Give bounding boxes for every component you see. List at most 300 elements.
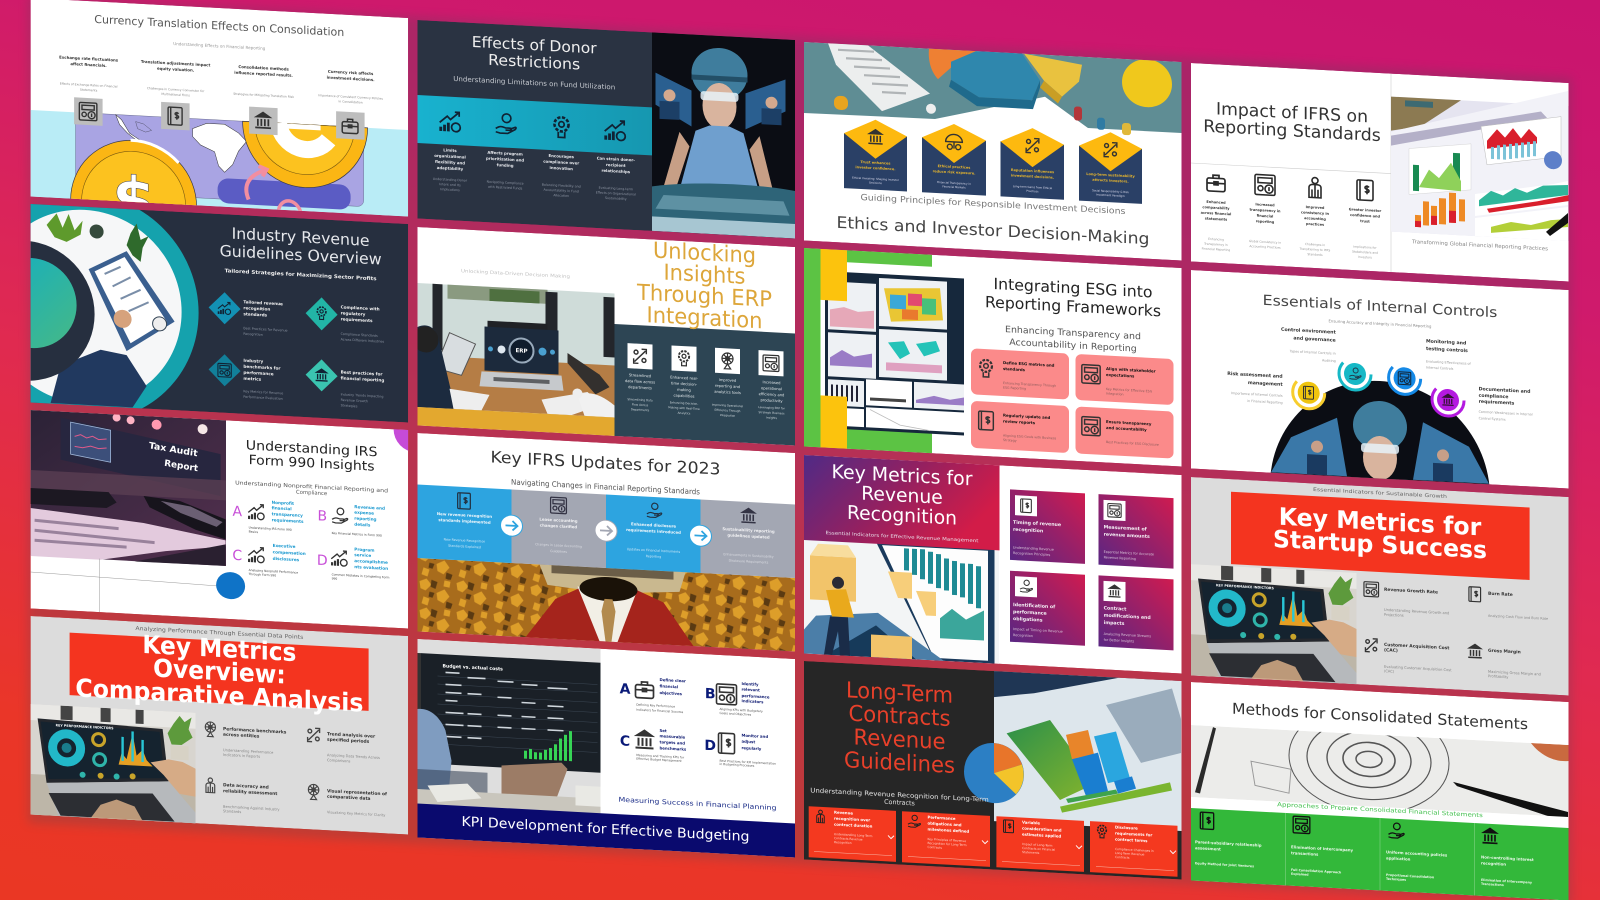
- step 1: New revenue recognition: [437, 511, 492, 519]
- slide: KPI Development for Effective Budgeting: [418, 639, 795, 858]
- column 4: [1481, 828, 1534, 889]
- title: Comparative Analysis: [75, 673, 363, 718]
- block: risk assessment: [1227, 371, 1283, 405]
- title: Key Metrics for: [832, 461, 973, 490]
- bold statements: statements: [1205, 217, 1227, 222]
- item D: in Budgeting Processes: [720, 762, 755, 768]
- step 2: [512, 489, 606, 568]
- metric: burn rate: [1469, 587, 1548, 621]
- card 3: review reports: [1003, 419, 1036, 425]
- item 2: Compliance with: [341, 304, 380, 311]
- column 2: Elimination of intercompany: [1291, 844, 1354, 853]
- subtitle: Tailored Strategies for Maximizing Sector Profits: [225, 268, 377, 282]
- bold statements: transparency in: [1249, 208, 1281, 213]
- card 2: [1076, 354, 1174, 405]
- card 3: obligations: [1013, 616, 1043, 624]
- red banner: [70, 633, 369, 711]
- column 1: assessment: [1195, 845, 1221, 852]
- column 1: affect financials.: [70, 61, 107, 68]
- slide: Key Metrics for Startup Success: [1191, 477, 1568, 696]
- item 1: [209, 291, 288, 338]
- column 2: Explained: [1291, 872, 1309, 877]
- arrow 1: [500, 515, 522, 537]
- slide: Integrating ESG into Reporting Frameworks: [804, 248, 1182, 467]
- title: Effects of Donor: [472, 33, 598, 58]
- step 2: Lease accounting: [539, 516, 578, 523]
- supporting notes: Improving Operational: [712, 403, 743, 408]
- card 4: Analyzing Revenue Streams: [1104, 632, 1151, 638]
- card 1: [844, 118, 907, 191]
- supporting notes: Challenges in: [1305, 242, 1325, 247]
- title: Methods for Consolidated Statements: [1232, 700, 1528, 733]
- card 3: Variable: [1022, 820, 1040, 826]
- metric 3: Benchmarking Against Industry: [223, 805, 280, 812]
- step 1: [418, 484, 512, 563]
- decorative lines and node: [31, 555, 245, 620]
- supporting notes: Effects on Organizational: [596, 190, 636, 197]
- card 3: Impact of Timing on Revenue: [1013, 627, 1063, 634]
- supporting notes: Integration: [720, 413, 735, 418]
- card 1: Contracts Revenue: [834, 836, 863, 842]
- item B: Goals and Objectives: [720, 711, 752, 717]
- card 2: Financial Transparency in: [937, 180, 971, 186]
- item D: adjust: [742, 739, 755, 744]
- block: documentation: Common Weaknesses in Internal: [1479, 410, 1533, 417]
- column 2: Challenges in Currency Conversion for: [147, 86, 205, 93]
- card 1: Decisions: [869, 180, 883, 185]
- metric: gross margin: [1468, 644, 1541, 681]
- card 4: Investment Paradigm: [1096, 192, 1125, 198]
- item A: Basics: [249, 530, 259, 534]
- title: [636, 238, 772, 335]
- block: risk assessment: management: [1248, 380, 1283, 388]
- statements: [625, 373, 784, 403]
- card 1: investor confidence.: [855, 165, 896, 171]
- block: monitoring: Internal Controls: [1426, 365, 1454, 371]
- item 1: recognition: [243, 305, 270, 312]
- illustration: world map and coins: [30, 110, 408, 216]
- card 3: Practices: [1026, 189, 1039, 193]
- card 2: [922, 122, 986, 196]
- item B: reporting: [354, 516, 377, 522]
- card 1: Recognition Principles: [1013, 551, 1050, 557]
- metric: revenue growth: Revenue Growth Rate: [1384, 587, 1438, 596]
- metric 1: Understanding Performance: [223, 748, 274, 755]
- supporting notes: Accountability in Fund: [544, 188, 579, 194]
- supporting notes: Strategic Business: [759, 410, 785, 415]
- metric: burn rate: Burn Rate: [1488, 591, 1513, 598]
- icons: [1207, 172, 1373, 201]
- card 3: Recognition: [1013, 633, 1033, 638]
- supporting notes: Implications: [440, 187, 460, 192]
- metric: CAC: (CAC): [1384, 647, 1398, 654]
- metric 1: Indicators in Reports: [223, 753, 260, 759]
- subtitle: Navigating Changes in Financial Reporting Standards: [511, 477, 700, 496]
- photo: KPI laptop: KEY PERFORMANCE INDICTORS: [1216, 583, 1274, 590]
- subtitle: Compliance: [296, 490, 327, 497]
- block: documentation: Control Systems: [1479, 416, 1506, 422]
- card 3: Identification of: [1013, 602, 1056, 610]
- title: Through ERP: [636, 281, 772, 313]
- title: Integrating ESG into: [993, 275, 1152, 301]
- metric 2: [308, 728, 380, 765]
- step 4: Enhancements in Sustainability: [723, 552, 774, 559]
- photo: financial charts: [1391, 82, 1569, 241]
- item D: D: [704, 738, 716, 754]
- card 2: Essential Metrics for Accurate: [1104, 550, 1154, 557]
- supporting notes: Stakeholders and: [1352, 250, 1378, 255]
- title: Key IFRS Updates for 2023: [490, 447, 720, 479]
- subtitle: Understanding Revenue Recognition for Long-Term: [810, 786, 989, 804]
- title: Long-Term: [846, 678, 953, 709]
- photo: tax audit report: Tax Audit: [148, 441, 199, 459]
- step 3: requirements introduced: [626, 527, 681, 535]
- card 3: Regularly update and: [1003, 413, 1050, 420]
- block: control environment: Control environment: [1281, 327, 1336, 336]
- column 3: application: [1386, 855, 1411, 862]
- node: yellow ring: [1293, 376, 1325, 410]
- title: Ethics and Investor Decision-Making: [836, 213, 1149, 248]
- metric 3: Standards: [223, 809, 241, 814]
- item A: [233, 498, 304, 536]
- subtitle: Contracts: [884, 798, 916, 807]
- item B: relevant: [742, 687, 760, 693]
- item 1: Best Practices for Revenue: [243, 326, 288, 333]
- subtitle: Guiding Principles for Responsible Investment Decisions: [860, 193, 1126, 217]
- metric 4: [308, 784, 387, 817]
- title: [246, 438, 377, 475]
- item B: [317, 502, 385, 538]
- card 2: obligations and: [928, 821, 962, 827]
- column 1: Statements: [80, 88, 98, 93]
- step 4: [700, 499, 795, 578]
- item C: targets and: [660, 739, 685, 746]
- arrow 3: [690, 525, 712, 547]
- step 4: Disclosure Requirements: [729, 558, 769, 565]
- card 4: [1090, 821, 1178, 877]
- caption: Approaches to Prepare Consolidated Financial Statements: [1277, 802, 1483, 819]
- card 2: revenue amounts: [1104, 532, 1150, 540]
- title: Revenue: [853, 725, 945, 755]
- photo: mirrored dashboard tablet: [964, 669, 1182, 831]
- arrow 2: [595, 520, 617, 542]
- item 2: requirements: [341, 316, 373, 323]
- metric 2: Comparisons: [327, 758, 351, 763]
- title: [832, 461, 973, 530]
- statements: operational: [761, 386, 782, 391]
- card 3: [971, 401, 1069, 453]
- metric 3: [206, 778, 280, 816]
- supporting notes: Investors: [1358, 255, 1372, 260]
- red banner: [1231, 492, 1530, 580]
- item A: Indicators for Financial Success: [636, 708, 684, 714]
- supporting notes: Analytics: [678, 411, 691, 415]
- item D: nts evaluation: [354, 564, 388, 571]
- column 3: Strategies for Mitigating Translation Risk: [233, 92, 294, 99]
- subtitle: Understanding Effects on Financial Reporting: [173, 41, 266, 51]
- item 4: financial reporting: [341, 375, 384, 383]
- title: Integration: [646, 303, 762, 334]
- card 4: Ensure transparency: [1106, 419, 1152, 426]
- supporting notes: Leveraging ERP for: [758, 405, 786, 411]
- bold statements: comparability: [1202, 205, 1230, 211]
- item 3: [209, 353, 283, 401]
- column 4: recognition: [1481, 860, 1506, 867]
- slide: Ethics and Investor Decision-Making: [804, 41, 1182, 261]
- photo: KPI laptop: [1191, 564, 1356, 684]
- metric 1: Performance benchmarks: [223, 726, 287, 736]
- item C: measurable: [660, 733, 686, 740]
- card 3: estimates applied: [1022, 832, 1061, 839]
- item A: A: [620, 681, 631, 698]
- item A: requirements: [272, 517, 304, 524]
- item 3: metrics: [243, 376, 262, 382]
- bold statements: consistency in: [1301, 210, 1330, 216]
- column 3: [233, 64, 294, 136]
- step 4: guidelines updated: [727, 532, 770, 540]
- bold statements: relationships: [601, 168, 631, 174]
- subtitle: Accountability in Reporting: [1009, 338, 1137, 355]
- card 2: Measurement of: [1104, 524, 1148, 533]
- supporting notes: Understanding Donor: [433, 177, 468, 183]
- teal band: [418, 95, 652, 155]
- item 4: Revenue Growth: [341, 398, 368, 403]
- bold statements: accounting: [1304, 216, 1326, 221]
- card 3: [1000, 126, 1064, 200]
- metric: CAC: (CAC): [1384, 669, 1395, 674]
- supporting notes: Insights: [766, 415, 778, 420]
- item D: service: [354, 552, 371, 558]
- dashboard screenshot: [825, 271, 964, 435]
- step 1: standards implemented: [438, 517, 491, 525]
- statements: reporting and: [715, 384, 740, 389]
- step 3: Updates on Financial Instruments: [627, 547, 681, 554]
- block: documentation: Documentation and: [1479, 386, 1531, 395]
- supporting notes: [433, 177, 636, 202]
- slate panel: [614, 324, 795, 446]
- column 4: Importance of Consistent Currency Policies: [318, 93, 383, 101]
- block: monitoring: Monitoring and: [1426, 338, 1466, 347]
- card 2: reduce risk exposure.: [933, 169, 975, 176]
- photo: ERP meeting: [412, 283, 614, 417]
- metric: CAC: Customer Acquisition Cost: [1384, 642, 1449, 651]
- item D: Monitor and: [742, 733, 768, 739]
- block: control environment: Auditing: [1322, 358, 1336, 363]
- item D: regularly: [742, 745, 762, 751]
- card 1: [809, 806, 896, 862]
- subtitle: Understanding Limitations on Fund Utilization: [453, 75, 615, 91]
- column 3: [1386, 823, 1448, 884]
- item D: Program: [354, 547, 375, 553]
- slide: Industry Revenue Guidelines Overview: [30, 204, 408, 422]
- item A: transparency: [272, 511, 303, 518]
- column 2: transactions: [1291, 850, 1319, 857]
- statements: efficiency and: [759, 392, 784, 397]
- card 2: Revenue Reporting: [1104, 555, 1136, 561]
- item C: Analyzing Nonprofit Performance: [249, 568, 298, 575]
- metric 1: [205, 722, 287, 760]
- item 3: Industry: [243, 358, 263, 364]
- item B: Aligning KPIs with Budgetary: [720, 707, 763, 713]
- supporting notes: Global Consistency in: [1249, 239, 1281, 245]
- title: Insights: [664, 261, 745, 290]
- photo: circular visor image: [1270, 375, 1490, 607]
- card 4: Disclosure: [1115, 824, 1138, 831]
- supporting notes: Departments: [631, 407, 650, 412]
- title: Overview:: [153, 654, 286, 690]
- bold statements: flexibility and: [435, 159, 465, 166]
- title: Guidelines Overview: [220, 242, 382, 269]
- card 2: Ethical practices: [938, 164, 970, 170]
- step 1: New Revenue Recognition: [444, 537, 485, 544]
- item 4: Strategies: [341, 403, 358, 408]
- item 2: [306, 297, 384, 344]
- card 1: Revenue: [834, 810, 853, 816]
- step 2: Guidelines: [550, 549, 567, 554]
- item 3: benchmarks for: [243, 364, 281, 371]
- title: Unlocking: [653, 238, 756, 269]
- card 4: for Better Insights: [1104, 638, 1134, 644]
- statements: data flow across: [625, 379, 655, 385]
- supporting notes: Efficiency Through: [715, 408, 741, 413]
- card 1: Enhancing Transparency Through: [1003, 381, 1056, 388]
- photo: tax audit report: [31, 409, 226, 566]
- item A: Nonprofit: [272, 500, 294, 506]
- title: Currency Translation Effects on Consolidation: [94, 13, 344, 39]
- metric 4: Visualizing Key Metrics for Clarity: [327, 810, 385, 817]
- card 4: requirements for: [1115, 830, 1152, 837]
- subtitle: [810, 786, 989, 811]
- column 2: [141, 59, 210, 132]
- supporting notes: Navigating Compliance: [487, 180, 524, 186]
- title: [844, 678, 955, 779]
- item C: disclosures: [273, 556, 300, 562]
- card 2: Integration: [1106, 392, 1124, 396]
- statements: Streamlined: [629, 373, 651, 378]
- column 2: Full Consolidation Approach: [1291, 868, 1342, 875]
- column 1: Parent-subsidiary relationship: [1195, 839, 1262, 848]
- item D: 990: [332, 576, 337, 581]
- card 3: Statements: [1022, 850, 1040, 855]
- subtitle: Unlocking Data-Driven Decision Making: [461, 268, 570, 280]
- item D: [317, 545, 390, 584]
- title: [75, 626, 363, 718]
- bold statements: practices: [1306, 222, 1324, 227]
- card 2: [902, 811, 990, 867]
- supporting notes: Standards: [1307, 252, 1323, 257]
- block: monitoring: [1426, 338, 1471, 372]
- supporting notes: [627, 397, 786, 421]
- supporting notes: Balancing Flexibility and: [542, 183, 581, 189]
- card 1: recognition: [1013, 527, 1043, 534]
- statements: Increased: [763, 380, 780, 385]
- item B: details: [354, 522, 371, 528]
- title: Industry Revenue: [232, 225, 370, 250]
- item C: C: [620, 733, 630, 750]
- item A: [620, 675, 686, 714]
- bold statements: prioritization and: [486, 156, 524, 163]
- metric: CAC: [1365, 638, 1452, 677]
- title: [1273, 502, 1487, 564]
- block: control environment: [1281, 327, 1336, 363]
- slide: Key IFRS Updates for 2023: [418, 433, 795, 652]
- supporting notes: Financial Reporting: [1202, 247, 1230, 252]
- title: [220, 227, 381, 264]
- slide: Effects of Donor Restrictions: [418, 20, 795, 239]
- metric: gross margin: Gross Margin: [1488, 648, 1521, 655]
- item B: B: [705, 686, 716, 703]
- card 2: Contracts: [928, 845, 942, 850]
- statements: capabilities: [674, 394, 695, 399]
- supporting notes: Implications for: [1353, 245, 1377, 250]
- item A: A: [233, 504, 243, 520]
- supporting notes: Intent and Its: [439, 182, 461, 187]
- item A: Defining Key Performance: [636, 703, 675, 709]
- metric 2: Trend analysis over: [327, 731, 376, 740]
- metric 1: across entities: [223, 732, 260, 740]
- item C: Effective Budget Management: [636, 757, 683, 763]
- bold statements: confidence and: [1350, 213, 1380, 219]
- item D: accomplishme: [354, 558, 388, 565]
- title: Essentials of Internal Controls: [1263, 293, 1497, 321]
- caption: Measuring Success in Financial Planning: [618, 796, 776, 812]
- column 1: Exchange rate fluctuations: [59, 55, 119, 63]
- slide: Key Metrics for Revenue Recognition: [804, 455, 1182, 674]
- column 4: Elimination of Intercompany: [1481, 878, 1533, 885]
- card 2: Key Metrics for Effective ESG: [1106, 387, 1153, 393]
- supporting notes: Flow Across: [632, 402, 649, 407]
- title: [473, 36, 597, 70]
- block: risk assessment: Risk assessment and: [1227, 371, 1283, 380]
- column 2: Multinational Firms: [161, 92, 190, 97]
- column 3: Techniques: [1386, 877, 1406, 882]
- caption: Transforming Global Financial Reporting Practices: [1411, 239, 1548, 252]
- item D: Common Mistakes in Completing Form: [332, 572, 390, 580]
- item B: Key Financial Metrics in Form 990: [332, 531, 382, 538]
- card 3: Contracts on Financial: [1022, 846, 1055, 852]
- card 1: Understanding Long-Term: [834, 832, 872, 838]
- metric 3: Data accuracy and: [223, 782, 269, 791]
- header block: [804, 455, 1000, 550]
- bold statements: Affects program: [487, 150, 523, 157]
- card 2: expectations: [1106, 372, 1135, 379]
- column 1: [59, 55, 119, 127]
- photo: budget dashboard on monitor: [418, 639, 600, 814]
- slide: Long-Term Contracts Revenue Guidelines: [804, 661, 1182, 880]
- subtitle: [1005, 325, 1141, 355]
- statements: Improved: [719, 378, 736, 383]
- card 1: Understanding Revenue: [1013, 546, 1054, 552]
- card 4: impacts: [1104, 620, 1125, 627]
- step 3: Reporting: [646, 554, 661, 559]
- item 4: Industry Trends Impacting: [341, 392, 383, 399]
- card 4: Compliance Challenges in: [1115, 847, 1154, 853]
- card 4: Long-term sustainability: [1086, 172, 1135, 179]
- block: control environment: and governance: [1293, 335, 1336, 344]
- column 3: Proportional Consolidation: [1386, 873, 1435, 879]
- corner accent: [394, 407, 438, 454]
- item A: financial: [660, 683, 678, 689]
- supporting notes: Accounting Practices: [1249, 244, 1281, 250]
- item D: Best Practices for KPI Implementation: [720, 759, 776, 766]
- slide: Impact of IFRS on Reporting Standards: [1191, 63, 1569, 282]
- item B: expense: [354, 510, 374, 516]
- photo: sketch with rings and pens: [1191, 696, 1568, 824]
- title: Startup Success: [1273, 525, 1487, 564]
- title: Restrictions: [488, 51, 580, 74]
- metric 4: Visual representation of: [327, 788, 387, 797]
- title: Key Metrics for: [1279, 503, 1481, 541]
